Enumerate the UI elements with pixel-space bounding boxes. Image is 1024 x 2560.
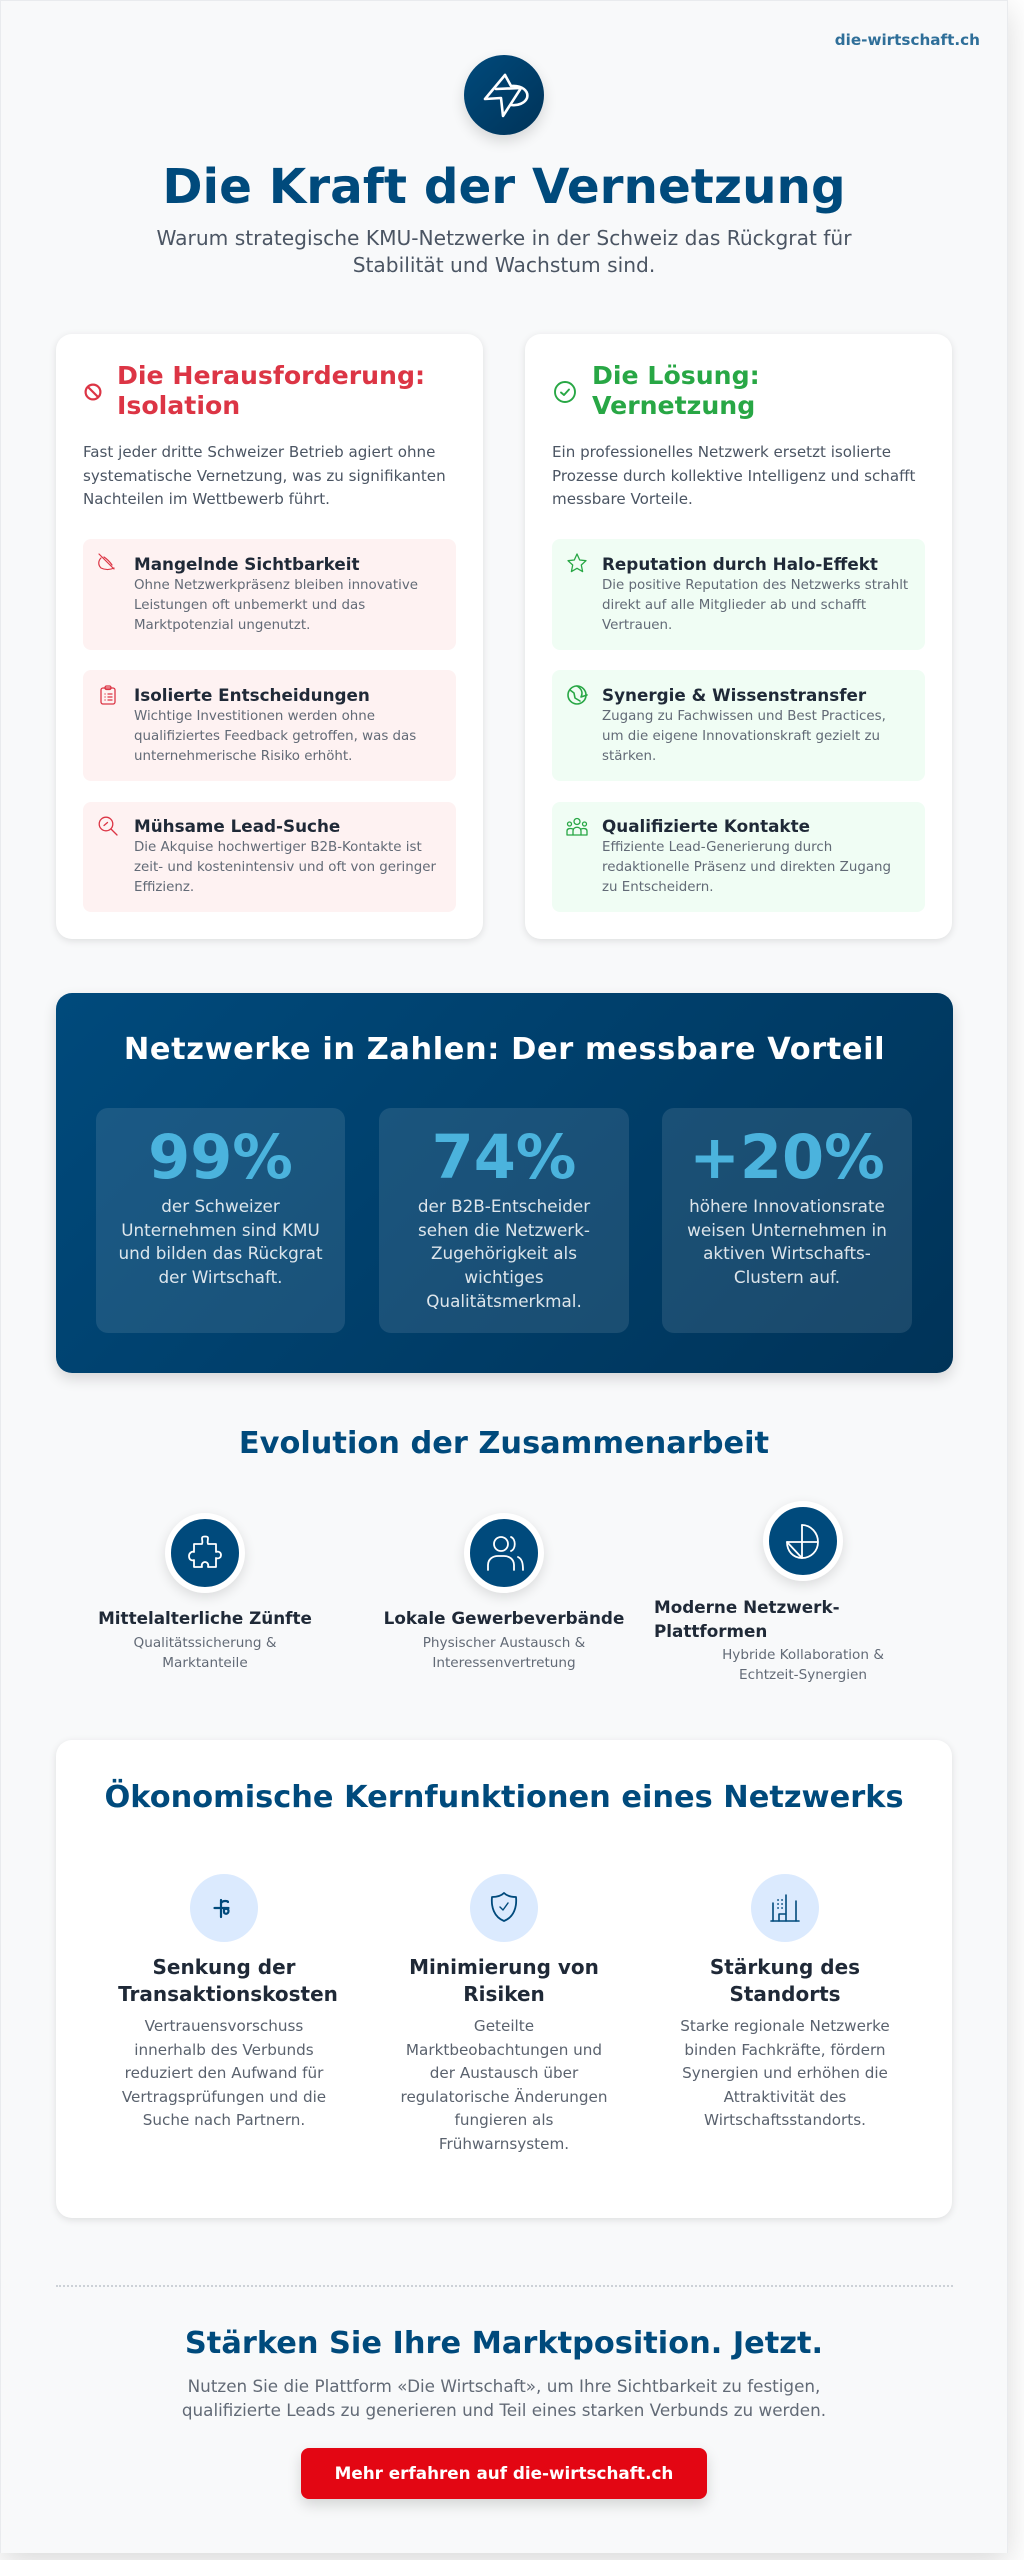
item text: Marktpotenzial ungenutzt. (134, 618, 310, 633)
icon: puzzle node (165, 1513, 245, 1593)
description: sehen die Netzwerk- (418, 1220, 590, 1240)
timeline text: Zünfte: Qualitätssicherung & (134, 1635, 276, 1651)
item text: stärken. (602, 749, 656, 764)
item text: redaktionelle Präsenz und direkten Zugang (602, 860, 891, 875)
item text: zu Entscheidern. (602, 880, 714, 895)
heading: challenge (117, 361, 425, 420)
item text (134, 578, 418, 633)
column text: Transaktionskosten: Vertragsprüfungen und die (122, 2088, 326, 2106)
column title: Transaktionskosten (118, 1955, 338, 2006)
text: solution intro: messbare Vorteile. (552, 490, 693, 508)
timeline label: Zünfte: Mittelalterliche Zünfte (98, 1608, 312, 1628)
item text: Wichtige Investitionen werden ohne (134, 709, 375, 724)
text: solution intro (552, 443, 916, 508)
column text: Risiken: Marktbeobachtungen und (406, 2041, 602, 2059)
heading: challenge: Die Herausforderung: (117, 361, 425, 390)
number: 99% (148, 1123, 293, 1193)
description (418, 1196, 590, 1311)
text: solution intro: Prozesse durch kollektive Intelligenz und schafft (552, 466, 915, 484)
description (687, 1196, 887, 1287)
icon: check circle (554, 381, 576, 403)
column title: Risiken (409, 1955, 599, 2006)
icon: clipboard (100, 685, 116, 705)
panel: solution (525, 334, 952, 939)
timeline text: Plattformen: Hybride Kollaboration & (722, 1647, 884, 1663)
column text: Standort: binden Fachkräfte, fördern (684, 2041, 886, 2059)
column title: Transaktionskosten: Senkung der (152, 1955, 296, 1979)
column title: Standort: Stärkung des (710, 1955, 860, 1979)
icon: user group (566, 818, 588, 836)
icon: cost circle (190, 1874, 258, 1942)
item title: Isolierte Entscheidungen (134, 685, 370, 705)
timeline text: Zünfte: Marktanteile (162, 1655, 248, 1671)
description: weisen Unternehmen in (687, 1220, 887, 1240)
subtitle: Warum strategische KMU-Netzwerke in der Schweiz das Rückgrat für (156, 226, 852, 250)
item: Kontakte (552, 802, 925, 912)
icon: magnifier (98, 816, 118, 836)
icon: users node (464, 1513, 544, 1593)
description: höhere Innovationsrate (689, 1196, 885, 1216)
icon: logo bolt and circle (464, 55, 544, 135)
text: challenge intro: systematische Vernetzung, was zu signifikanten (83, 466, 446, 484)
item title: Synergie & Wissenstransfer (602, 685, 866, 705)
text: challenge intro (83, 443, 446, 508)
timeline text: Gewerbeverbände: Physischer Austausch & (423, 1635, 585, 1651)
timeline label: Gewerbeverbände: Lokale Gewerbeverbände (384, 1608, 624, 1628)
description: aktiven Wirtschafts- (703, 1243, 871, 1263)
heading: call to action: Stärken Sie Ihre Marktposition. Jetzt. (185, 2326, 823, 2361)
column text: Risiken: Geteilte (474, 2017, 534, 2035)
heading: solution: Die Lösung: (592, 361, 760, 390)
button (301, 2448, 707, 2499)
brand label: die-wirtschaft.ch (835, 31, 980, 49)
description: wichtiges (464, 1267, 544, 1287)
heading: evolution: Evolution der Zusammenarbeit (239, 1426, 769, 1461)
column text: Standort: Synergien und erhöhen die (682, 2064, 888, 2082)
column text: Standort (680, 2017, 890, 2129)
text: call to action: qualifizierte Leads zu generieren und Teil eines starken Verbunds zu werden. (182, 2400, 826, 2420)
column text: Risiken: Frühwarnsystem. (439, 2135, 569, 2153)
panel: challenge (56, 334, 483, 939)
item text: Ohne Netzwerkpräsenz bleiben innovative (134, 578, 418, 593)
item title: Mühsame Lead-Suche (134, 816, 340, 836)
timeline label: Plattformen (654, 1597, 840, 1641)
icon: shield circle (470, 1874, 538, 1942)
item: Mühsame Lead-Suche (83, 802, 456, 912)
item text: qualifiziertes Feedback getroffen, was das (134, 729, 416, 744)
item: Synergie (552, 670, 925, 781)
subtitle: Stabilität und Wachstum sind. (353, 253, 655, 277)
item text (602, 840, 891, 895)
stat card: 74% (379, 1108, 629, 1333)
title: Die Kraft der Vernetzung (162, 159, 846, 215)
text: challenge intro: Nachteilen im Wettbewerb führt. (83, 490, 330, 508)
timeline text: Plattformen: Echtzeit-Synergien (739, 1667, 867, 1683)
item text: Zugang zu Fachwissen und Best Practices, (602, 709, 886, 724)
stat card: 99% (96, 1108, 345, 1333)
panel: core functions (56, 1740, 952, 2218)
description: Qualitätsmerkmal. (426, 1291, 582, 1311)
panel: stats (56, 993, 953, 1373)
description: Unternehmen sind KMU (121, 1220, 320, 1240)
text: challenge intro: Fast jeder dritte Schweizer Betrieb agiert ohne (83, 443, 435, 461)
item text: um die eigene Innovationskraft gezielt zu (602, 729, 880, 744)
timeline label: Plattformen: Moderne Netzwerk- (654, 1597, 840, 1617)
column title: Risiken: Minimierung von (409, 1955, 599, 1979)
subtitle (156, 226, 852, 277)
item text (134, 840, 436, 895)
column text: Risiken: regulatorische Änderungen (401, 2088, 607, 2106)
column title: Transaktionskosten: Transaktionskosten (118, 1982, 338, 2006)
item text (134, 709, 416, 764)
item title: Mangelnde Sichtbarkeit (134, 554, 360, 574)
item text: Die positive Reputation des Netzwerks strahlt (602, 578, 908, 593)
text: call to action (182, 2376, 826, 2420)
description: Zugehörigkeit als (431, 1243, 577, 1263)
item: Isolierte Entscheidungen (83, 670, 456, 781)
item text: Vertrauen. (602, 618, 672, 633)
column text: Standort: Wirtschaftsstandorts. (704, 2111, 866, 2129)
item text (602, 578, 908, 633)
column text: Transaktionskosten: innerhalb des Verbunds (134, 2041, 314, 2059)
column text: Transaktionskosten: reduziert den Aufwand für (125, 2064, 323, 2082)
column title: Standort (710, 1955, 860, 2006)
stat card: +20% (662, 1108, 912, 1333)
icon: building circle (751, 1874, 819, 1942)
item text: Effiziente Lead-Generierung durch (602, 840, 832, 855)
number: +20% (689, 1123, 885, 1193)
column text: Transaktionskosten: Vertrauensvorschuss (145, 2017, 303, 2035)
heading: stats: Netzwerke in Zahlen: Der messbare Vorteil (124, 1032, 885, 1067)
column text: Risiken: der Austausch über (430, 2064, 578, 2082)
item text (602, 709, 886, 764)
icon: globe (567, 685, 588, 705)
icon: chart node (763, 1501, 843, 1581)
description: der Wirtschaft. (158, 1267, 282, 1287)
heading: solution: Vernetzung (592, 391, 755, 420)
number: 74% (432, 1123, 576, 1193)
description: der Schweizer (161, 1196, 280, 1216)
description: und bilden das Rückgrat (118, 1243, 323, 1263)
column title: Risiken: Risiken (463, 1982, 545, 2006)
heading: solution (592, 361, 760, 420)
item text: unternehmerische Risiko erhöht. (134, 749, 352, 764)
column text: Risiken: fungieren als (455, 2111, 553, 2129)
column text: Risiken (401, 2017, 607, 2153)
text: solution intro: Ein professionelles Netzwerk ersetzt isolierte (552, 443, 891, 461)
item: Reputation (552, 539, 925, 650)
item text: Leistungen oft unbemerkt und das (134, 598, 365, 613)
heading: challenge: Isolation (117, 391, 240, 420)
item text: Die Akquise hochwertiger B2B-Kontakte ist (134, 840, 422, 855)
button: Mehr erfahren auf die-wirtschaft.ch (335, 2463, 673, 2483)
item: Mangelnde Sichtbarkeit (83, 539, 456, 650)
column text: Standort: Attraktivität des (724, 2088, 846, 2106)
item text: direkt auf alle Mitglieder ab und schafft (602, 598, 866, 613)
column text: Transaktionskosten: Suche nach Partnern. (143, 2111, 305, 2129)
icon: star (567, 553, 587, 572)
text: call to action: Nutzen Sie die Plattform «Die Wirtschaft», um Ihre Sichtbarkeit zu festigen, (188, 2376, 820, 2396)
item title: Reputation durch Halo-Effekt (602, 554, 878, 574)
description: der B2B-Entscheider (418, 1196, 590, 1216)
description: Clustern auf. (734, 1267, 840, 1287)
item title: Qualifizierte Kontakte (602, 816, 810, 836)
description (118, 1196, 323, 1287)
column title: Standort: Standorts (729, 1982, 841, 2006)
heading: core functions: Ökonomische Kernfunktionen eines Netzwerks (104, 1780, 904, 1815)
timeline label: Plattformen: Plattformen (654, 1621, 767, 1641)
icon: hidden eye (98, 553, 115, 570)
column text: Standort: Starke regionale Netzwerke (680, 2017, 890, 2035)
icon: prohibited (84, 384, 102, 400)
timeline text: Plattformen (722, 1647, 884, 1683)
timeline text: Gewerbeverbände: Interessenvertretung (432, 1655, 576, 1671)
column text: Transaktionskosten (122, 2017, 326, 2129)
item text: Effizienz. (134, 880, 194, 895)
timeline text: Zünfte (134, 1635, 276, 1671)
timeline text: Gewerbeverbände (423, 1635, 585, 1671)
item text: zeit- und kostenintensiv und oft von geringer (134, 860, 436, 875)
